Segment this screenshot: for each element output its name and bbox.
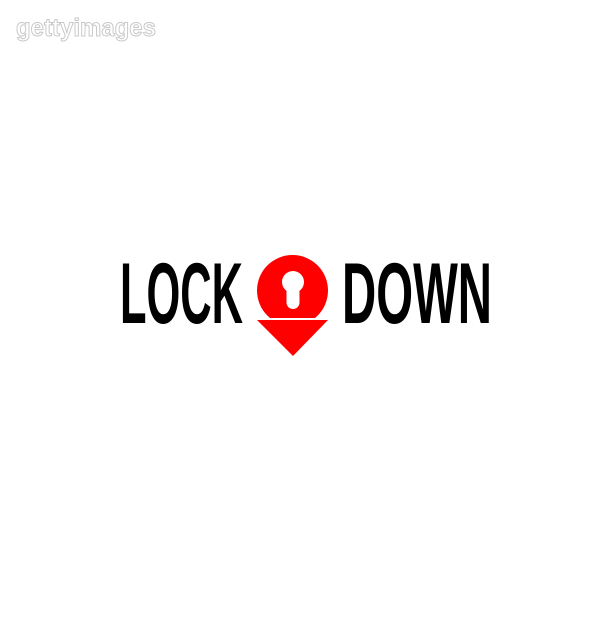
watermark: gettyimages: gettyimages [16, 14, 156, 42]
icon: red pin with keyhole and down arrow [255, 255, 331, 356]
heading word: DOWN: DOWN [342, 246, 492, 342]
heading word: LOCK: LOCK [120, 246, 243, 342]
